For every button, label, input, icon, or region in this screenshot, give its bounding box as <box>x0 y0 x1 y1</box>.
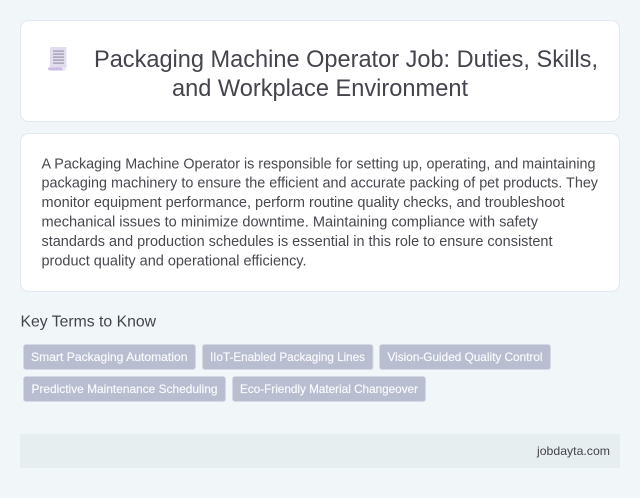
title <box>94 46 598 102</box>
footer bar <box>20 434 620 468</box>
text block: description: monitor equipment performance, perform routine quality checks, and troubleshoot <box>42 195 564 211</box>
chip: vision-guided quality control: Vision-Guided Quality Control <box>388 350 542 364</box>
chip: smart packaging automation: Smart Packaging Automation <box>31 350 188 364</box>
text block: description: product quality and operational efficiency. <box>42 253 306 269</box>
text block: description <box>42 156 599 269</box>
chip: iiot-enabled packaging lines: IIoT-Enabled Packaging Lines <box>210 350 365 364</box>
panel: description card <box>20 134 620 292</box>
footer source text: jobdayta.com <box>536 444 610 458</box>
chip: predictive maintenance scheduling <box>24 376 226 402</box>
icon: document scroll <box>48 47 66 71</box>
chip: vision-guided quality control <box>380 344 550 370</box>
text block: description: packaging machinery to ensure the efficient and accurate packing of pet products. They <box>42 176 599 192</box>
title: and Workplace Environment <box>172 75 468 102</box>
text block: description: mechanical issues to minimize downtime. Maintaining compliance with safety <box>42 215 539 231</box>
chip: eco-friendly material changeover <box>232 376 426 402</box>
title: Packaging Machine Operator Job: Duties, Skills, <box>94 46 598 73</box>
text block: description: standards and production schedules is essential in this role to ensure consistent <box>42 234 552 250</box>
text block: description: A Packaging Machine Operator is responsible for setting up, operating, and maintaining <box>42 156 596 172</box>
heading: key terms: Key Terms to Know <box>20 314 156 331</box>
chip: smart packaging automation <box>24 344 196 370</box>
chip: iiot-enabled packaging lines <box>202 344 373 370</box>
chip: eco-friendly material changeover: Eco-Friendly Material Changeover <box>240 382 418 396</box>
chip: predictive maintenance scheduling: Predictive Maintenance Scheduling <box>32 382 218 396</box>
panel: title card <box>20 20 620 122</box>
